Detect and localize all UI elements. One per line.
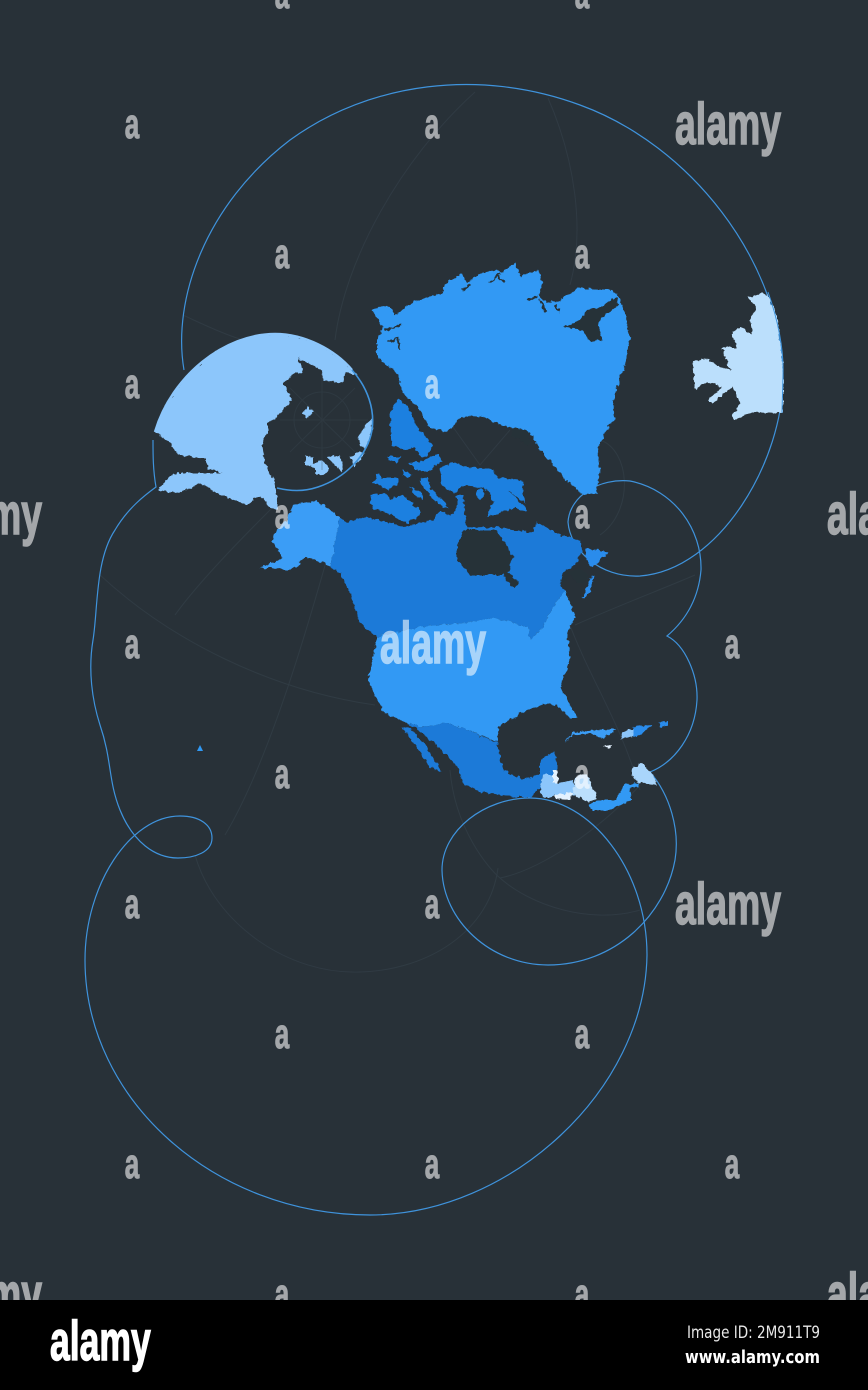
- Baja California: [402, 727, 442, 772]
- watermarks: repeated letters: a: [725, 1141, 740, 1188]
- watermarks: repeated letters: a: [125, 621, 140, 668]
- island: Baffin: [440, 462, 527, 517]
- smooth arc edge of Asia: [155, 334, 352, 432]
- land: Caribbean islands: [565, 721, 668, 749]
- land: Colombia tip: [632, 763, 658, 785]
- land: Asia: [155, 334, 357, 510]
- land: Europe: [692, 293, 783, 420]
- watermarks: repeated letters: a: [275, 1011, 290, 1058]
- island: Somerset: [420, 477, 448, 508]
- land: Alaska: [260, 500, 340, 570]
- watermarks: repeated letters: a: [575, 1271, 590, 1318]
- bay: Scoresby region: [563, 297, 619, 342]
- watermarks: repeated letters: a: [425, 361, 440, 408]
- land: United States: [368, 590, 577, 742]
- islands: Arctic archipelago: [302, 407, 373, 475]
- map: all land masses: [155, 263, 783, 810]
- watermarks: repeated letters: a: [575, 491, 590, 538]
- island: Prince Charles: [476, 489, 484, 499]
- watermarks: repeated letters: a: [425, 1141, 440, 1188]
- land: Hawaii: [197, 745, 203, 751]
- image id: Image ID: 2M911T9: [687, 1323, 820, 1343]
- footer logo: alamy: [50, 1310, 151, 1372]
- watermarks: repeated letters: a: [275, 231, 290, 278]
- graticule lines: [100, 92, 695, 972]
- inset graticule: [280, 372, 368, 470]
- watermarks: repeated letters: a: [125, 101, 140, 148]
- land: Newfoundland and Nova Scotia: [583, 548, 608, 598]
- watermarks: repeated letters: a: [275, 491, 290, 538]
- watermarks: repeated letters: a: [575, 1011, 590, 1058]
- land: Mexico: [402, 723, 557, 797]
- watermarks: repeated letters: a: [725, 621, 740, 668]
- fjords of Greenland: [385, 273, 560, 350]
- watermarks: repeated letters: a: [125, 361, 140, 408]
- watermarks: repeated letters: a: [275, 1271, 290, 1318]
- watermarks: alamy wordmarks: alamy: [380, 612, 486, 676]
- watermarks: repeated letters: a: [575, 751, 590, 798]
- water: Hudson Bay: [457, 530, 520, 588]
- bay: Disko: [512, 428, 532, 447]
- watermarks: repeated letters: a: [275, 751, 290, 798]
- inset circle outline: [277, 370, 373, 490]
- watermarks: alamy wordmarks: alamy: [675, 873, 781, 937]
- watermarks: repeated letters: a: [425, 101, 440, 148]
- watermarks: repeated letters: [125, 0, 740, 1318]
- watermarks: repeated letters: a: [125, 881, 140, 928]
- footer bar: [0, 1300, 868, 1390]
- outer arc of Europe: [768, 292, 783, 413]
- islands: Queen Elizabeth group: [388, 454, 442, 478]
- island: Prince of Wales: [410, 487, 423, 500]
- water: Gulf of St Lawrence: [560, 567, 590, 587]
- spiral outline curve: [85, 85, 783, 1215]
- watermarks: repeated letters: a: [575, 231, 590, 278]
- watermarks: alamy wordmarks: alamy: [675, 93, 781, 157]
- website: www.alamy.com: [685, 1347, 820, 1368]
- land: Central America: [540, 763, 658, 810]
- watermarks: repeated letters: a: [425, 881, 440, 928]
- island: Victoria: [370, 493, 420, 523]
- land: Greenland: [372, 263, 630, 495]
- land: Canada mainland: [330, 495, 582, 640]
- watermarks: repeated letters: a: [125, 1141, 140, 1188]
- island: Banks: [373, 473, 398, 490]
- island: Ellesmere: [390, 398, 433, 458]
